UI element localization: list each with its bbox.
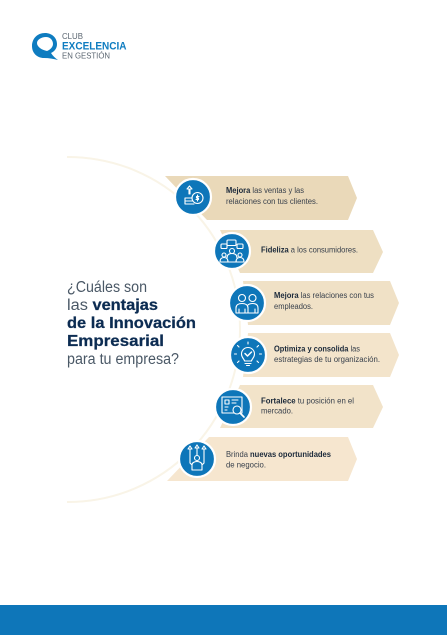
logo text: EXCELENCIA [62,40,127,52]
banner 1: ventas [165,176,357,220]
icon: market chart with magnifier [215,389,251,425]
banner 5 text [261,396,354,416]
heading: las ventajas [67,297,158,314]
heading: Empresarial [67,333,164,350]
banner 3 text: Mejora las relaciones con tus [274,291,374,300]
heading: para tu empresa? [67,351,179,368]
heading: ¿Cuáles son [67,279,147,296]
icon: growth arrows [179,441,215,477]
banner 4 text [274,344,380,364]
banner 6: oportunidades [167,437,357,481]
icon: employees [229,285,265,321]
banner 1 text [226,186,318,206]
banner 6 text: Brinda nuevas oportunidades [226,450,332,459]
banner 2 text: Fideliza a los consumidores. [261,246,358,254]
decorative arc [67,157,240,502]
icon: logo swirl [32,33,58,60]
banner 5 text: Fortalece tu posición en el [261,396,354,406]
banner 3: empleados [229,281,399,325]
logo text [62,32,127,61]
heading: de la Innovación [67,315,196,332]
logo text: CLUB [62,32,83,41]
icon: light bulb [230,337,266,373]
banner 4: estrategias [230,333,399,377]
footer bar [0,605,447,635]
logo text: EN GESTIÓN [62,52,110,61]
banner 4 text: Optimiza y consolida las [274,344,360,354]
icon: coin and arrow [175,179,211,215]
banner 1 text: relaciones con tus clientes. [226,197,318,206]
banner 6 text: de negocio. [226,460,266,470]
banner 3 text: empleados. [274,302,313,311]
banner 4 text: estrategias de tu organización. [274,355,380,364]
banner 2: consumidores [214,230,383,273]
banner 5 text: mercado. [261,406,293,416]
logo [32,32,127,61]
banner 5: mercado [215,385,383,428]
banner 1 text: Mejora las ventas y las [226,186,304,195]
banner 6 text [226,450,332,470]
banner 3 text [274,291,374,311]
heading [67,279,196,368]
icon: customers [214,233,250,269]
